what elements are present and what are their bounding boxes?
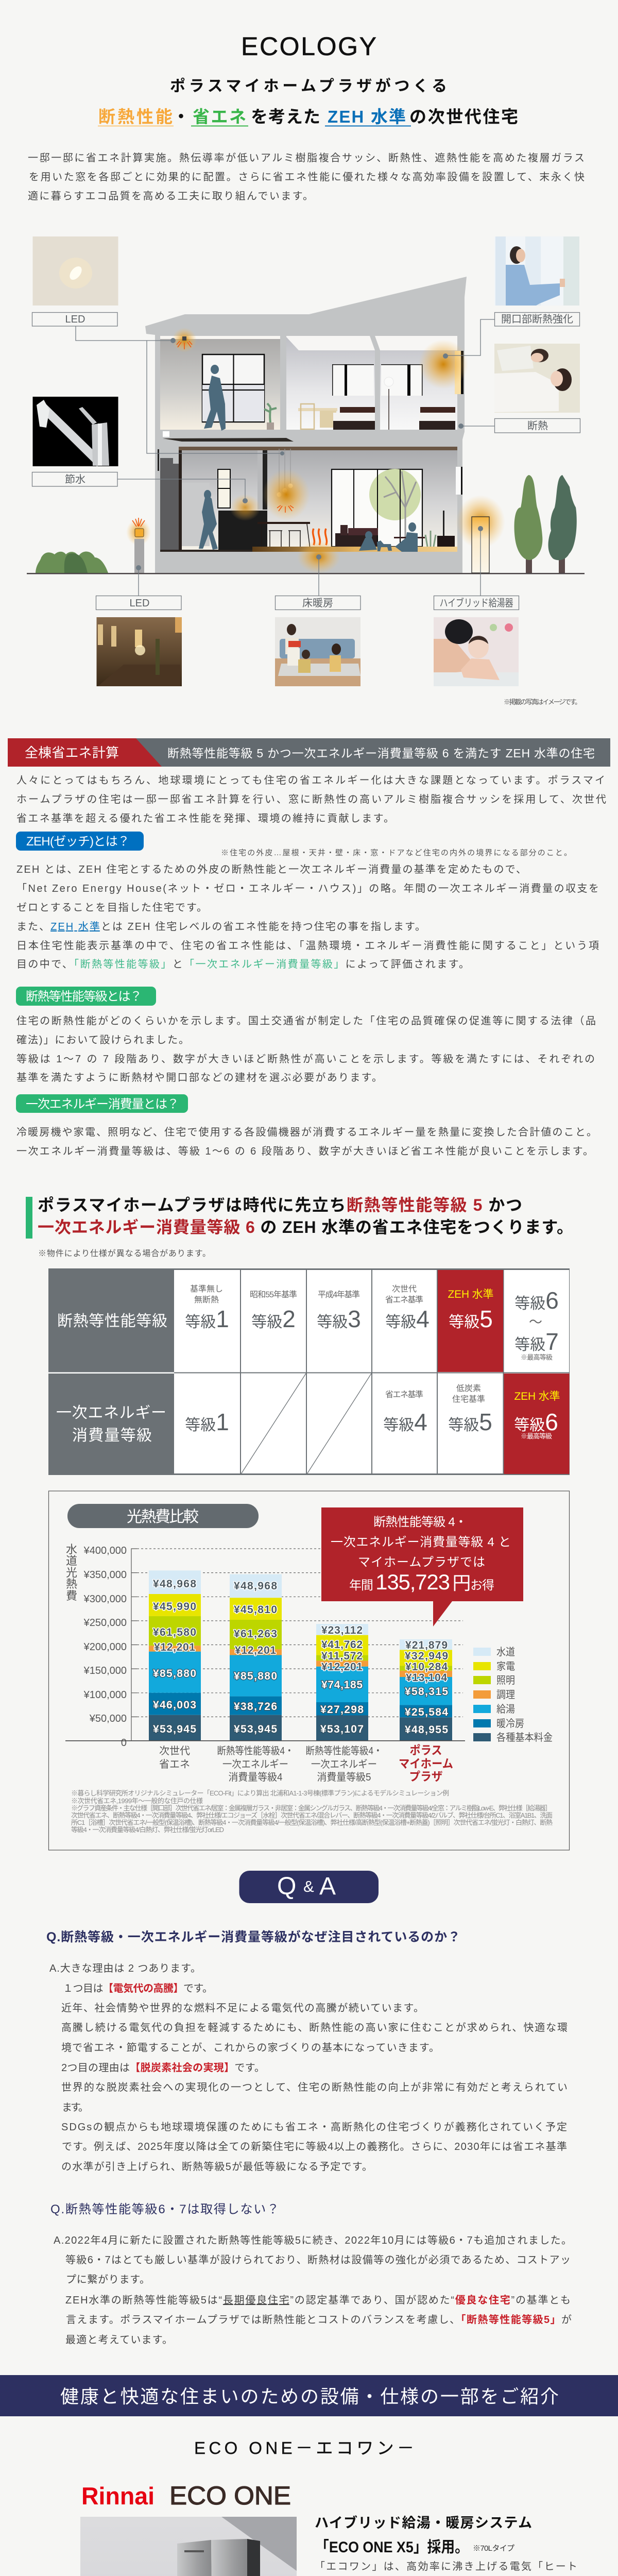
text block: ECO ONE heading and description: ※70Lタイプ bbox=[473, 2544, 514, 2553]
answer 1: 高騰し続ける電気代の負担を軽減するためにも、断熱性能の高い家に住むことが求められ、快適な環 bbox=[61, 2022, 568, 2033]
heading: grade 5 and grade 6 commitment: ポラスマイホームプラザは時代に先立ち断熱等性能等級 5 かつ bbox=[38, 1196, 522, 1214]
note: specification: ※物件により仕様が異なる場合があります。 bbox=[38, 1249, 211, 1258]
row 1 cells: 無断熱 bbox=[194, 1295, 219, 1304]
bar: My Home Plaza: ¥13,104 bbox=[406, 1672, 447, 1684]
heading line: zeh next generation housing: ・ bbox=[173, 107, 190, 126]
button: insulation grade bbox=[16, 987, 156, 1006]
footnotes: 等級4・一次消費量等級4/白熱灯、弊社仕様/蛍光灯orLED bbox=[71, 1826, 224, 1834]
answer 1: 2つ目の理由は【脱炭素社会の実現】です。 bbox=[61, 2062, 265, 2074]
callout: annual saving: 断熱性能等級 4・ bbox=[373, 1515, 467, 1529]
photo: kitchen faucet bbox=[33, 397, 118, 466]
row 1 cells: 等級3 bbox=[317, 1306, 361, 1332]
bar: grade 4 and 4: ¥12,201 bbox=[235, 1645, 276, 1656]
bar: next-generation: ¥45,990 bbox=[153, 1601, 196, 1613]
row 1 cells: 平成4年基準 bbox=[318, 1290, 360, 1299]
bar: My Home Plaza: ¥21,879 bbox=[405, 1639, 448, 1651]
bar: My Home Plaza: ¥58,315 bbox=[405, 1686, 448, 1698]
banner: all-house energy calculation bbox=[8, 738, 610, 767]
row 1 cells: 省エネ基準 bbox=[385, 1295, 423, 1304]
bar: grade 4 and 4: ¥38,726 bbox=[234, 1701, 277, 1713]
answer 2: 等級6・7はとても厳しい基準が設けられており、断熱材は設備等の強化が必須であるため、コストアッ bbox=[65, 2254, 571, 2266]
button: what is ZEH: ZEH(ゼッチ)とは？ bbox=[26, 835, 130, 849]
chart: stacked bar utility costs bbox=[65, 1543, 553, 1783]
text block: intro paragraph: 適に暮らすエコ品質を高める工夫に取り組んでいます。 bbox=[28, 190, 313, 202]
bar: grade 4 and 5: ¥12,201 bbox=[321, 1661, 363, 1673]
text block: intro paragraph: を用いた窓を各邸ごとに効果的に配置。さらに省エネ性能に優れた様々な高効率設備を設置して、末永く快 bbox=[29, 171, 585, 183]
bar: My Home Plaza: ¥32,949 bbox=[405, 1650, 448, 1662]
answer 1: 世界的な脱炭素社会への実現化の一つとして、住宅の断熱性能の向上が非常に有効だと考えられてい bbox=[61, 2081, 568, 2093]
label: LED outdoor bbox=[96, 596, 181, 610]
y axis labels: ¥300,000 bbox=[83, 1594, 127, 1605]
text block: intro paragraph bbox=[28, 152, 585, 202]
heading line: zeh next generation housing: の次世代住宅 bbox=[409, 107, 518, 126]
category labels: 次世代 bbox=[159, 1745, 190, 1757]
badge: Q&A bbox=[239, 1871, 379, 1903]
photo: family on sofa bbox=[275, 617, 360, 686]
row 2 cells: 等級4 bbox=[383, 1409, 427, 1435]
answer 1: 近年、社会情勢や世界的な燃料不足による電気代の高騰が続いています。 bbox=[61, 2002, 424, 2014]
y axis labels: ¥400,000 bbox=[83, 1545, 127, 1556]
row header: primary energy grade: 一次エネルギー bbox=[56, 1404, 166, 1421]
bar: grade 4 and 4: ¥85,880 bbox=[234, 1670, 277, 1682]
bar: grade 4 and 5: ¥11,572 bbox=[321, 1650, 363, 1662]
answer 2 bbox=[54, 2234, 572, 2346]
row 2 cells: ※最高等級 bbox=[521, 1432, 552, 1440]
y axis labels: ¥200,000 bbox=[83, 1641, 127, 1653]
badge: Q&A: Q bbox=[277, 1873, 296, 1900]
text block: primary energy explanation bbox=[16, 1126, 597, 1157]
heading line: zeh next generation housing: ZEH 水準 bbox=[328, 107, 406, 126]
bar: My Home Plaza: ¥48,955 bbox=[405, 1724, 448, 1736]
bar: next-generation: ¥48,968 bbox=[153, 1578, 196, 1590]
bar: grade 4 and 5: ¥41,762 bbox=[321, 1639, 363, 1651]
bar: grade 4 and 4: ¥48,968 bbox=[234, 1580, 277, 1592]
heading: grade 5 and grade 6 commitment: 一次エネルギー消費量等級 6 の ZEH 水準の省エネ住宅をつくります。 bbox=[38, 1218, 573, 1236]
footnote: images: ※掲載の写真はイメージです。 bbox=[504, 698, 581, 706]
label: insulation bbox=[494, 418, 580, 433]
logo: Rinnai ECO ONE: ECO ONE bbox=[169, 2481, 291, 2510]
row 1 cells: ZEH 水準 bbox=[448, 1289, 493, 1300]
bar: next-generation: ¥53,945 bbox=[153, 1723, 196, 1735]
y axis labels: ¥250,000 bbox=[83, 1617, 127, 1629]
icon: outdoor water heater bbox=[472, 517, 489, 573]
footnotes: ※グラフ資産条件・主な仕様［開口部］次世代省エネ/居室：金属複層ガラス・非居室：金属シングルガラス、断熱等級4・一次消費量等級4/全窓：アルミ樹脂Low-E、弊社仕様［給湯器］ bbox=[71, 1804, 552, 1812]
footnotes: 所C1［浴槽］次世代省エネ/一般型(保温浴槽)、断熱等級4・一次消費量等級4/一般型(保温浴槽)、弊社仕様/高断熱型(保温浴槽+断熱蓋)［照明］次世代省エネ/蛍光灯・白熱灯、断熱 bbox=[71, 1819, 553, 1826]
photo: mother and baby bbox=[494, 344, 580, 413]
category labels: 消費量等級4 bbox=[229, 1771, 282, 1783]
photo: LED ceiling light bbox=[33, 236, 118, 306]
row 1 cells: 等級5 bbox=[449, 1306, 493, 1332]
banner: all-house energy calculation: 全棟省エネ計算 bbox=[25, 745, 119, 760]
text block: ZEH explanation: 「Net Zero Energy House(ネット・ゼロ・エネルギー・ハウス)」の略。年間の一次エネルギー消費量の収支を bbox=[16, 883, 599, 894]
answer 2: A.2022年4月に新たに設置された断熱等性能等級5に続き、2022年10月には等級6・7も追加されました。 bbox=[54, 2234, 572, 2246]
row 1 cells: 等級7 bbox=[514, 1328, 559, 1355]
row 2 cells: 省エネ基準 bbox=[385, 1390, 423, 1399]
label: water saving bbox=[32, 472, 117, 486]
note: building envelope: ※住宅の外皮…屋根・天井・壁・床・窓・ドアなど住宅の内外の境界になる部分のこと。 bbox=[221, 849, 572, 857]
label: window insulation: 開口部断熱強化 bbox=[501, 313, 573, 325]
footnotes: 次世代省エネ、断熱等級4・一次消費量等級4、弊社仕様/エコジョーズ［水栓］次世代省エネ/混合レバー、断熱等級4・一次消費量等級4/2バルブ、弊社仕様/台所C1、浴室A1B1、洗面 bbox=[71, 1811, 553, 1819]
pill heading: cost comparison: 光熱費比較 bbox=[127, 1509, 199, 1526]
button: what is ZEH bbox=[16, 832, 144, 851]
text block: insulation grade explanation: 等級は 1～7 の 7 段階あり、数字が大きいほど断熱性が高いことを示します。等級を満たすには、それぞれの bbox=[16, 1053, 595, 1065]
body copy: 「エコワン」は、高効率に沸き上げる電気「ヒート bbox=[315, 2561, 577, 2572]
label: floor heating bbox=[275, 596, 360, 610]
answer 2: 最適と考えています。 bbox=[65, 2334, 173, 2346]
text block: insulation grade explanation: 基準を満たすように断熱材や開口部などの建材を選ぶ必要があります。 bbox=[16, 1072, 382, 1083]
row 1 cells bbox=[185, 1284, 559, 1361]
grid lines bbox=[137, 1549, 463, 1717]
heading: ECO ONE: ECO ONE－エコワン－ bbox=[194, 2438, 414, 2458]
legend: 水道 bbox=[496, 1646, 515, 1658]
text block: ZEH explanation bbox=[16, 863, 599, 970]
row 1 cells: 等級2 bbox=[251, 1306, 296, 1332]
row 2 cells: ZEH 水準 bbox=[514, 1391, 560, 1402]
text block: ZEH explanation: 日本住宅性能表示基準の中で、住宅の省エネ性能は、「温熱環境・エネルギー消費性能に関すること」という項 bbox=[16, 940, 599, 952]
bar: grade 4 and 5: ¥53,107 bbox=[320, 1723, 364, 1735]
text block: primary energy explanation: 冷暖房機や家電、照明など、住宅で使用する各設備機器が消費するエネルギー量を熱量に変換した合計値のこと。 bbox=[16, 1126, 597, 1138]
label: insulation: 断熱 bbox=[527, 420, 548, 432]
label: water saving: 節水 bbox=[65, 473, 85, 485]
table: grades bbox=[48, 1268, 570, 1475]
callout: annual saving: 年間 135,723 円お得 bbox=[349, 1570, 494, 1594]
text block: energy saving intro: ホームプラザの住宅は一邸一邸省エネ計算を行い、窓に断熱性の高いアルミ樹脂複合サッシを採用して、次世代 bbox=[16, 793, 606, 805]
bar: My Home Plaza: ¥10,284 bbox=[405, 1661, 448, 1673]
heading line: zeh next generation housing: を考えた bbox=[251, 107, 320, 126]
label: floor heating: 床暖房 bbox=[302, 597, 333, 609]
label: hybrid water heater: ハイブリッド給湯器 bbox=[440, 597, 513, 609]
category labels: 断熱等性能等級4・ bbox=[217, 1745, 294, 1757]
legend: 調理 bbox=[496, 1689, 515, 1701]
label: LED bbox=[32, 312, 117, 326]
callout: annual saving: マイホームプラザでは bbox=[358, 1555, 485, 1569]
row 1 cells: 等級4 bbox=[385, 1306, 430, 1332]
row 2 cells: 等級5 bbox=[448, 1409, 492, 1435]
callout: annual saving bbox=[321, 1507, 523, 1626]
legend: 各種基本料金 bbox=[496, 1732, 553, 1743]
text block: energy saving intro: 省エネ基準を超える優れた省エネ性能を発揮、環境の維持に貢献します。 bbox=[16, 812, 394, 824]
footnotes bbox=[71, 1789, 553, 1834]
connector dots bbox=[136, 338, 483, 570]
bar: grade 4 and 5: ¥23,112 bbox=[321, 1624, 363, 1636]
heading: tagline: ポラスマイホームプラザがつくる bbox=[170, 77, 447, 95]
footnotes: ※暮らし科学研究所オリジナルシミュレーター「ECO-Fit」により算出 北浦和A1-1-3号棟(標準プラン)によるモデルシミュレーション例 bbox=[71, 1789, 449, 1797]
answer 1: SDGsの観点からも地球環境保護のためにも省エネ・高断熱化の住宅づくりが義務化されていく予定 bbox=[61, 2121, 567, 2133]
logo: Rinnai ECO ONE bbox=[81, 2481, 291, 2510]
category labels: マイホーム bbox=[399, 1757, 453, 1770]
heading line: zeh next generation housing: 断熱性能 bbox=[98, 107, 173, 126]
bar: grade 4 and 4: ¥61,263 bbox=[234, 1628, 277, 1640]
row 2 cells: 等級1 bbox=[185, 1409, 229, 1435]
logo: Rinnai ECO ONE: Rinnai bbox=[81, 2482, 154, 2510]
heading: tagline bbox=[98, 77, 518, 127]
legend: 暖冷房 bbox=[496, 1718, 524, 1730]
room: lower floor bbox=[158, 447, 457, 552]
title: ECOLOGY: ECOLOGY bbox=[241, 32, 376, 61]
axis title: 水道光熱費 bbox=[66, 1543, 77, 1602]
heading line: zeh next generation housing bbox=[98, 107, 518, 127]
text block: ECO ONE heading and description: ハイブリッド給湯・暖房システム bbox=[315, 2515, 532, 2531]
text block: intro paragraph: 一邸一邸に省エネ計算実施。熱伝導率が低いアルミ樹脂複合サッシ、断熱性、遮熱性能を高めた複層ガラス bbox=[28, 152, 585, 164]
answer 1: 境で省エネ・節電することが、これからの家づくりの基本になっていきます。 bbox=[61, 2042, 439, 2054]
bar: next-generation: ¥85,880 bbox=[153, 1668, 196, 1680]
room: upper right bbox=[282, 336, 457, 430]
label: LED: LED bbox=[65, 314, 85, 325]
diagram: house cross-section with equipment bbox=[27, 236, 585, 706]
answer 2: ZEH水準の断熱等性能等級5は“長期優良住宅”の認定基準であり、国が認めた“優良な住宅”の基準とも bbox=[65, 2294, 571, 2306]
text block: insulation grade explanation bbox=[16, 1015, 596, 1083]
row 2 cells: 等級6 bbox=[514, 1409, 558, 1435]
answer 1 bbox=[49, 1962, 568, 2173]
label: hybrid water heater bbox=[434, 596, 519, 610]
pill heading: cost comparison bbox=[67, 1504, 259, 1528]
bar: grade 4 and 5: ¥74,185 bbox=[321, 1679, 363, 1691]
text block: primary energy explanation: 一次エネルギー消費量等級は、等級 1～6 の 6 段階あり、数字が大きいほど省エネ性能が良いことを示します。 bbox=[16, 1145, 593, 1157]
row header: primary energy grade: 消費量等級 bbox=[72, 1427, 152, 1444]
bar: next-generation bbox=[149, 1570, 201, 1741]
row header: insulation grade: 断熱等性能等級 bbox=[57, 1313, 167, 1330]
wall windows bbox=[455, 351, 464, 495]
bar: grade 4 and 4: ¥45,810 bbox=[234, 1604, 277, 1616]
answer 1: の水準が引き上げられ、断熱等級5が最低等級になる予定です。 bbox=[61, 2161, 372, 2173]
row header: primary energy grade bbox=[56, 1404, 166, 1444]
callout: annual saving: 一次エネルギー消費量等級 4 と bbox=[331, 1535, 511, 1549]
y axis labels bbox=[83, 1545, 127, 1749]
section band: equipment introduction bbox=[0, 2375, 618, 2416]
trees and shrubs bbox=[36, 475, 577, 573]
answer 1: A.大きな理由は 2 つあります。 bbox=[49, 1962, 201, 1974]
y axis labels: ¥100,000 bbox=[83, 1689, 127, 1701]
bar: grade 4 and 4: ¥53,945 bbox=[234, 1723, 277, 1735]
bar: grade 4 and 5 bbox=[316, 1624, 368, 1741]
legend: 家電 bbox=[496, 1660, 515, 1672]
category labels: 一次エネルギー bbox=[222, 1758, 288, 1770]
panel: utility cost comparison bbox=[48, 1491, 570, 1850]
text block: insulation grade explanation: 確法)」において設けられました。 bbox=[16, 1034, 189, 1046]
button: primary energy bbox=[16, 1094, 188, 1113]
label: LED outdoor: LED bbox=[130, 598, 149, 609]
icon: garden lamp post bbox=[134, 529, 144, 573]
bar: next-generation: ¥61,580 bbox=[153, 1626, 196, 1638]
y axis labels: ¥150,000 bbox=[83, 1665, 127, 1676]
photo: woman at window bbox=[494, 236, 579, 306]
category labels: プラザ bbox=[409, 1770, 443, 1783]
row 1 cells: 次世代 bbox=[392, 1284, 417, 1294]
stair opening and floor gap bbox=[163, 431, 294, 442]
answer 1: １つ目は【電気代の高騰】です。 bbox=[63, 1982, 213, 1994]
row 2 cells bbox=[185, 1384, 560, 1440]
question 1: Q.断熱等級・一次エネルギー消費量等級がなぜ注目されているのか？ bbox=[46, 1929, 460, 1944]
category labels: 一次エネルギー bbox=[311, 1758, 377, 1770]
button: insulation grade: 断熱等性能等級とは？ bbox=[26, 990, 142, 1004]
row 2 cells: 住宅基準 bbox=[452, 1395, 485, 1404]
answer 1: です。例えば、2025年度以降は全ての新築住宅に等級4以上の義務化。さらに、2030年には省エネ基準 bbox=[62, 2141, 567, 2153]
bar: next-generation: ¥12,201 bbox=[154, 1641, 195, 1653]
legend: 給湯 bbox=[496, 1703, 515, 1715]
room: upper left bbox=[160, 336, 280, 431]
legend bbox=[473, 1646, 553, 1743]
answer 1: ます。 bbox=[62, 2102, 89, 2113]
category labels: ポラス bbox=[410, 1743, 442, 1757]
row 1 cells: 等級1 bbox=[185, 1306, 229, 1332]
footnotes: ※次世代省エネ,1999年～一般的な住戸の仕様 bbox=[71, 1797, 203, 1805]
text block: ECO ONE heading and description bbox=[315, 2515, 579, 2576]
section band: equipment introduction: 健康と快適な住まいのための設備・仕様の一部をご紹介 bbox=[60, 2386, 559, 2407]
row 1 cells: 等級6 bbox=[514, 1287, 559, 1314]
text block: ZEH explanation: ゼロとすることを目指した住宅です。 bbox=[16, 902, 207, 913]
row 1 cells: ※最高等級 bbox=[521, 1353, 553, 1361]
badge: Q&A: & bbox=[303, 1877, 314, 1895]
row 1 cells: 昭和55年基準 bbox=[250, 1290, 297, 1299]
row 1 cells: 〜 bbox=[529, 1314, 542, 1330]
text block: ECO ONE heading and description: 「ECO ONE X5」採用。 bbox=[315, 2539, 469, 2556]
answer 2: プに繋がります。 bbox=[66, 2274, 150, 2285]
bar: My Home Plaza bbox=[400, 1639, 452, 1741]
lights: glow spots bbox=[126, 328, 505, 573]
photo: house at night bbox=[97, 617, 182, 686]
question 2: Q.断熱等性能等級6・7は取得しない？ bbox=[50, 2202, 279, 2216]
house body bbox=[145, 277, 467, 573]
row 2 cells: 低炭素 bbox=[456, 1384, 481, 1393]
row 1 cells: 基準無し bbox=[190, 1284, 223, 1294]
photo: ECO ONE units bbox=[80, 2517, 297, 2576]
photo: parent and baby in bath bbox=[434, 617, 519, 686]
y axis labels: 0 bbox=[121, 1737, 127, 1749]
legend: 照明 bbox=[496, 1675, 515, 1686]
category labels bbox=[159, 1743, 453, 1783]
text block: insulation grade explanation: 住宅の断熱性能がどのくらいかを示します。国土交通省が制定した「住宅の品質確保の促進等に関する法律（品 bbox=[16, 1015, 596, 1027]
heading: grade 5 and grade 6 commitment bbox=[26, 1196, 573, 1239]
category labels: 消費量等級5 bbox=[317, 1771, 371, 1783]
text block: ZEH explanation: ZEH とは、ZEH 住宅とするための外皮の断熱性能と一次エネルギー消費量の基準を定めたもので、 bbox=[16, 863, 526, 875]
heading line: zeh next generation housing: 省エネ bbox=[193, 107, 246, 126]
ground line bbox=[27, 573, 585, 574]
bar: grade 4 and 4 bbox=[230, 1574, 282, 1741]
text block: ZEH explanation: また、ZEH 水準とは ZEH 住宅レベルの省エネ性能を持つ住宅の事を指します。 bbox=[16, 921, 425, 933]
bar: grade 4 and 5: ¥27,298 bbox=[320, 1704, 364, 1716]
category labels: 省エネ bbox=[159, 1758, 190, 1770]
text block: energy saving intro: 人々にとってはもちろん、地球環境にとっても住宅の省エネルギー化は大きな課題となっています。ポラスマイ bbox=[16, 774, 605, 786]
y axis labels: ¥50,000 bbox=[89, 1713, 127, 1724]
button: primary energy: 一次エネルギー消費量とは？ bbox=[26, 1097, 179, 1111]
ray icons bbox=[132, 336, 294, 527]
bar: My Home Plaza: ¥25,584 bbox=[405, 1706, 448, 1718]
answer 2: 言えます。ポラスマイホームプラザでは断熱性能とコストのバランスを考慮し、「断熱等性能等級5」が bbox=[66, 2314, 572, 2326]
badge: Q&A: A bbox=[319, 1873, 336, 1900]
text block: energy saving intro bbox=[16, 774, 606, 824]
category labels: 断熱等性能等級4・ bbox=[306, 1745, 382, 1757]
text block: ZEH explanation: 目の中で、「断熱等性能等級」と「一次エネルギー消費量等級」によって評価されます。 bbox=[16, 958, 469, 970]
bar: next-generation: ¥46,003 bbox=[153, 1699, 196, 1711]
banner: all-house energy calculation: 断熱等性能等級 5 かつ一次エネルギー消費量等級 6 を満たす ZEH 水準の住宅 bbox=[167, 747, 595, 760]
connector lines bbox=[76, 319, 494, 596]
y axis labels: ¥350,000 bbox=[83, 1569, 127, 1581]
